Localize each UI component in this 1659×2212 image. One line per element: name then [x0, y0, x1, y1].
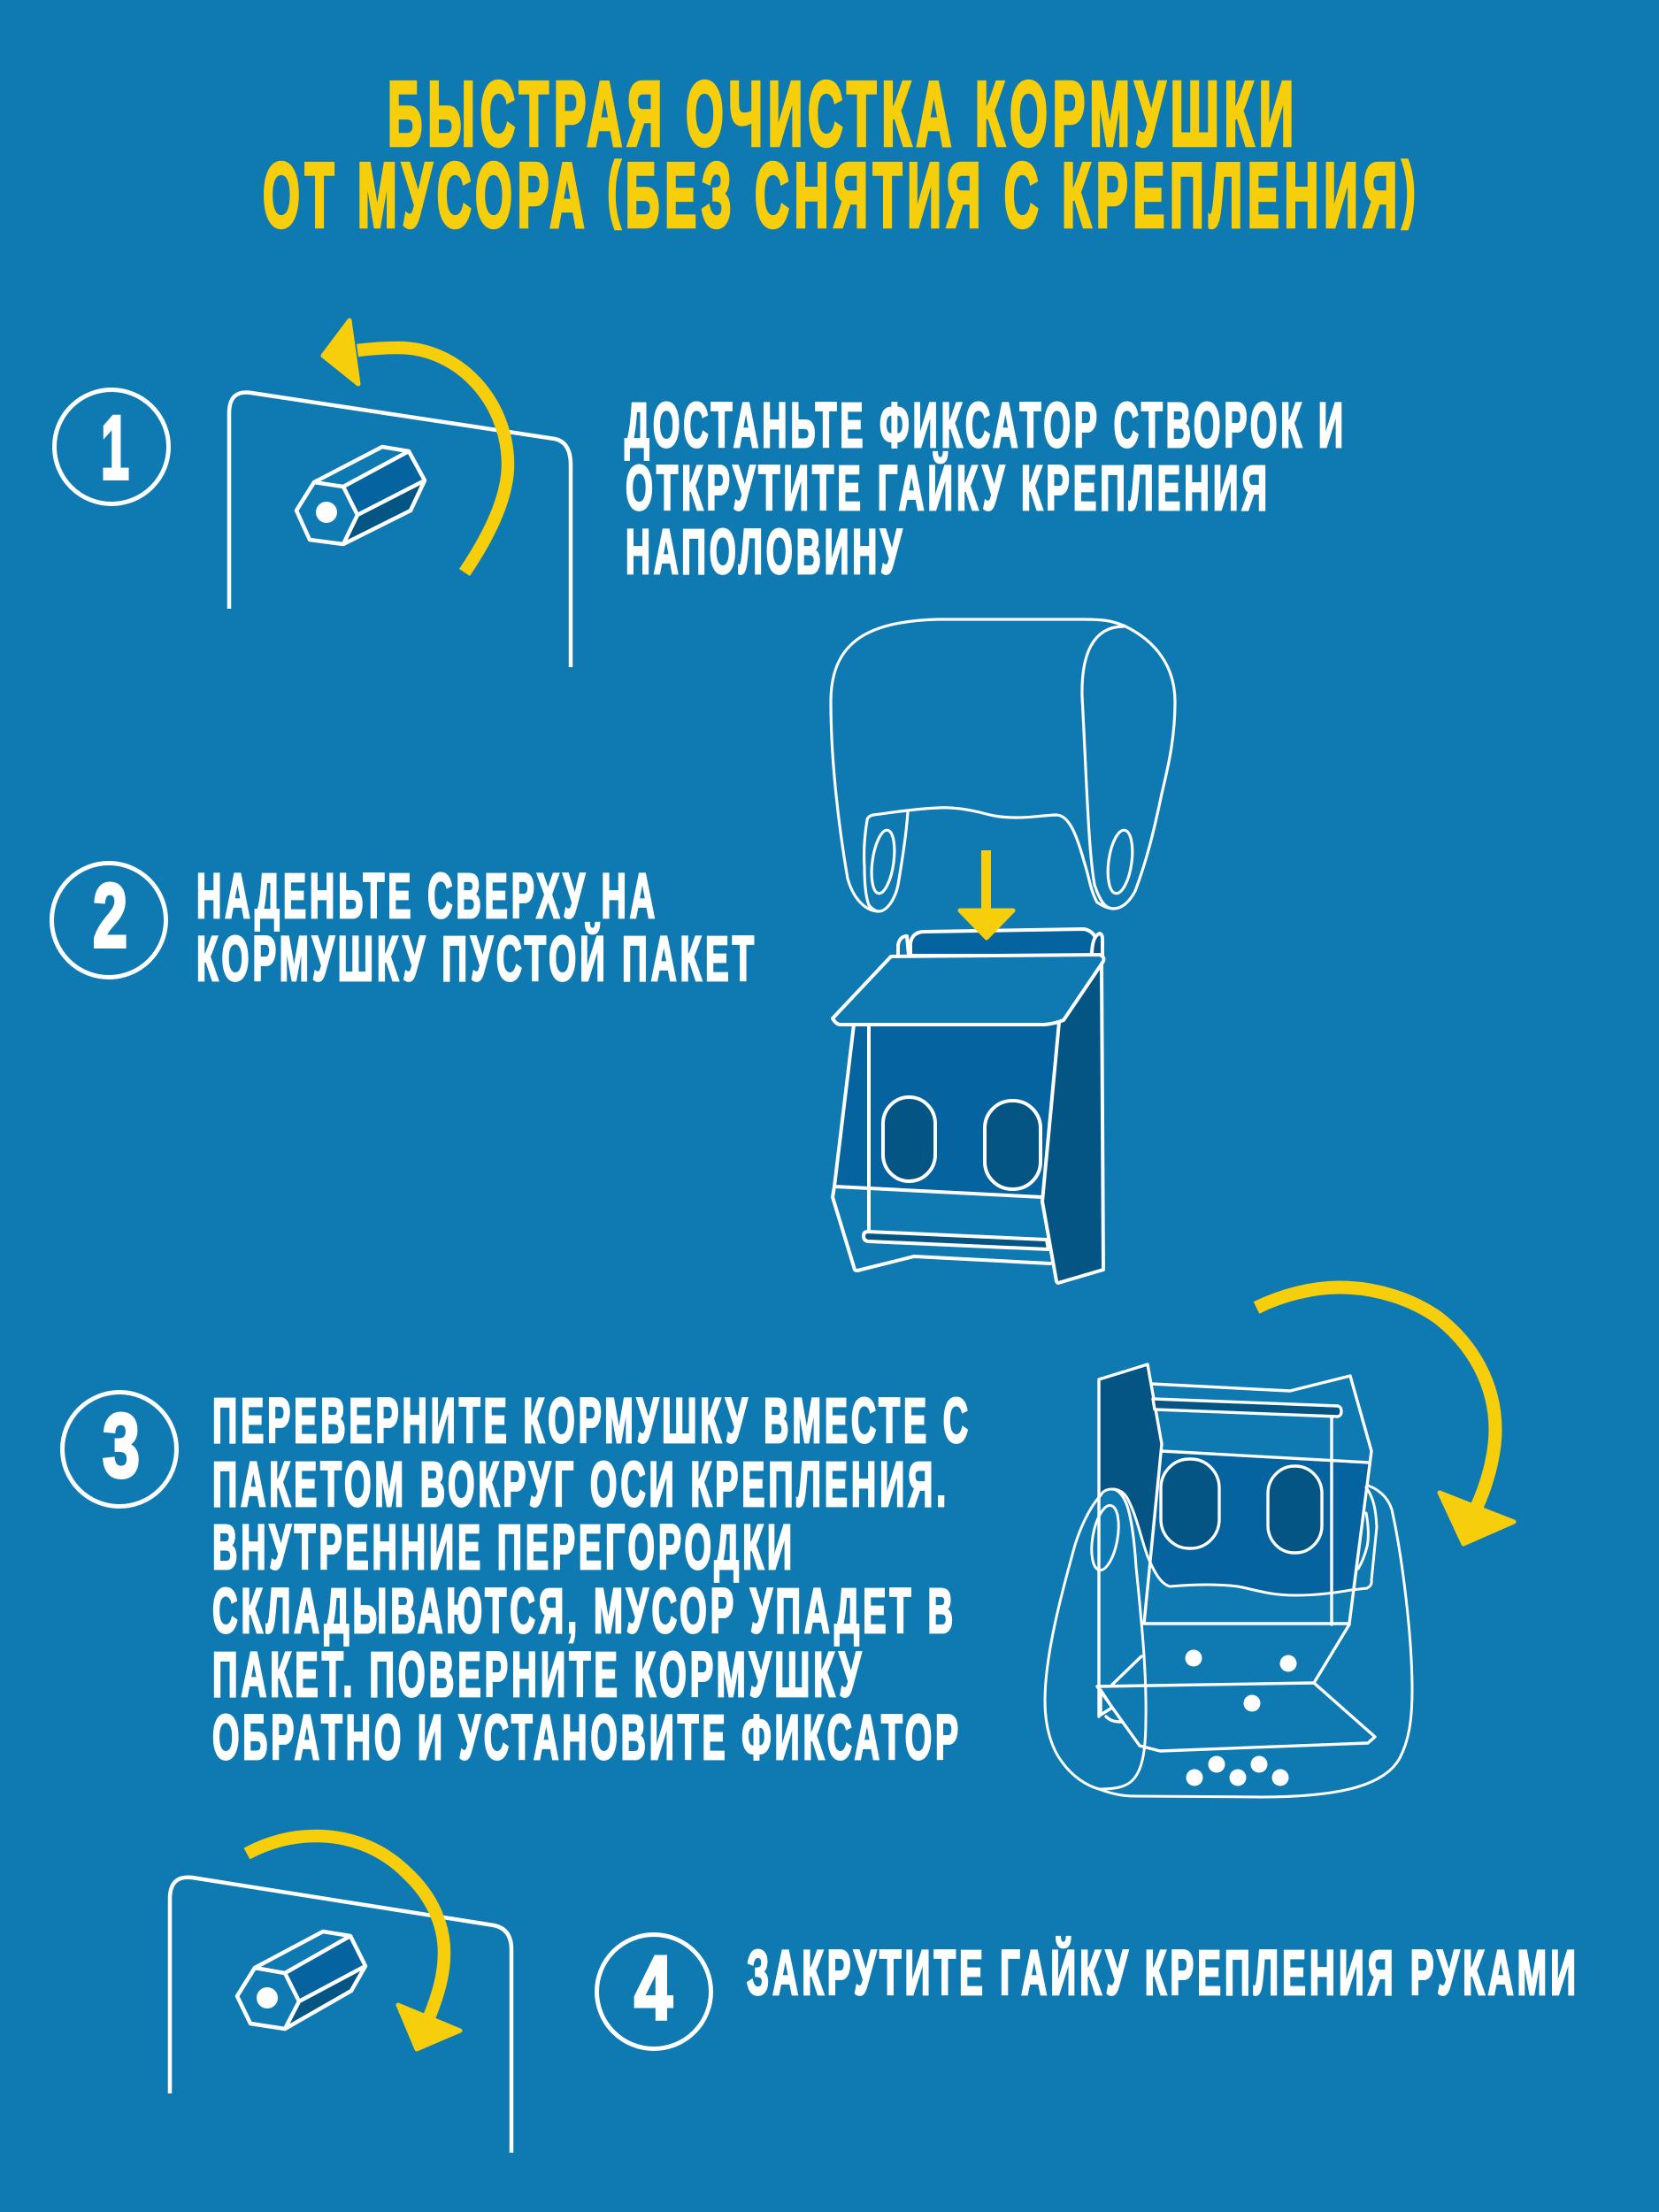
- step 3 text: ПАКЕТ. ПОВЕРНИТЕ КОРМУШКУ: [212, 1640, 864, 1710]
- step 1 text: НАПОЛОВИНУ: [626, 518, 905, 588]
- step 3 number badge: 3: [103, 1395, 140, 1496]
- title: (: [608, 149, 626, 229]
- holes: [1161, 1459, 1322, 1553]
- step 3 text: ВНУТРЕННИЕ ПЕРЕГОРОДКИ: [212, 1513, 795, 1583]
- title: [263, 63, 1420, 246]
- title: ): [1402, 149, 1420, 229]
- feeder holes: [883, 1097, 1041, 1189]
- feeder rod: [864, 1232, 1048, 1249]
- step 3 illustration: inverted feeder with bag: [1045, 1364, 1412, 1797]
- feeder front panel: [834, 1025, 1059, 1197]
- title: ОТ МУСОРА: [263, 144, 888, 246]
- step 2 number badge: 2: [93, 865, 127, 966]
- step 2 text: НАДЕНЬТЕ СВЕРХУ НА: [196, 862, 658, 932]
- step 3 text: ПАКЕТОМ ВОКРУГ ОСИ КРЕПЛЕНИЯ.: [212, 1450, 949, 1520]
- step 4 illustration: nut on feeder panel: [170, 1878, 511, 2153]
- step 2 text: КОРМУШКУ ПУСТОЙ ПАКЕТ: [196, 924, 757, 995]
- step 3 text: [212, 1386, 972, 1773]
- feeder back tabs: [898, 929, 1102, 956]
- feeder right side panel: [1042, 963, 1103, 1283]
- feeder roof: [833, 955, 1103, 1025]
- step 1 text: [625, 391, 1347, 588]
- step 1 illustration: nut on feeder panel: [229, 392, 571, 667]
- tray: [1097, 1683, 1375, 1751]
- step 2 arrow: down: [960, 850, 1013, 938]
- step 4 arrow: clockwise: [247, 1836, 460, 2049]
- step 1 number badge: [55, 389, 168, 504]
- step 1 arrow: counter-clockwise: [323, 320, 508, 572]
- step 3 text: ОБРАТНО И УСТАНОВИТЕ ФИКСАТОР: [212, 1703, 962, 1773]
- step 3 arrow: clockwise flip: [1256, 1287, 1514, 1544]
- step 2 text: [196, 862, 757, 995]
- rod: [1153, 1399, 1341, 1417]
- bag outline: [1045, 1486, 1412, 1797]
- feeder outline: [833, 963, 1103, 1283]
- step 2 number badge: [51, 864, 166, 977]
- inner panel with holes: [1148, 1453, 1370, 1595]
- step 4 number badge: 4: [634, 1938, 672, 2039]
- dark side panel: [1099, 1364, 1162, 1556]
- step 1 number badge: 1: [101, 397, 129, 498]
- step 2 illustration: feeder: [833, 929, 1103, 1283]
- step 3 text: СКЛАДЫВАЮТСЯ, МУСОР УПАДЕТ В: [212, 1577, 956, 1647]
- step 4 number badge: [596, 1934, 711, 2049]
- step 2 illustration: empty bag: [831, 619, 1175, 911]
- step 3 text: ПЕРЕВЕРНИТЕ КОРМУШКУ ВМЕСТЕ С: [212, 1386, 972, 1456]
- step 3 number badge: [62, 1393, 177, 1506]
- falling debris dots: [1186, 1649, 1297, 1786]
